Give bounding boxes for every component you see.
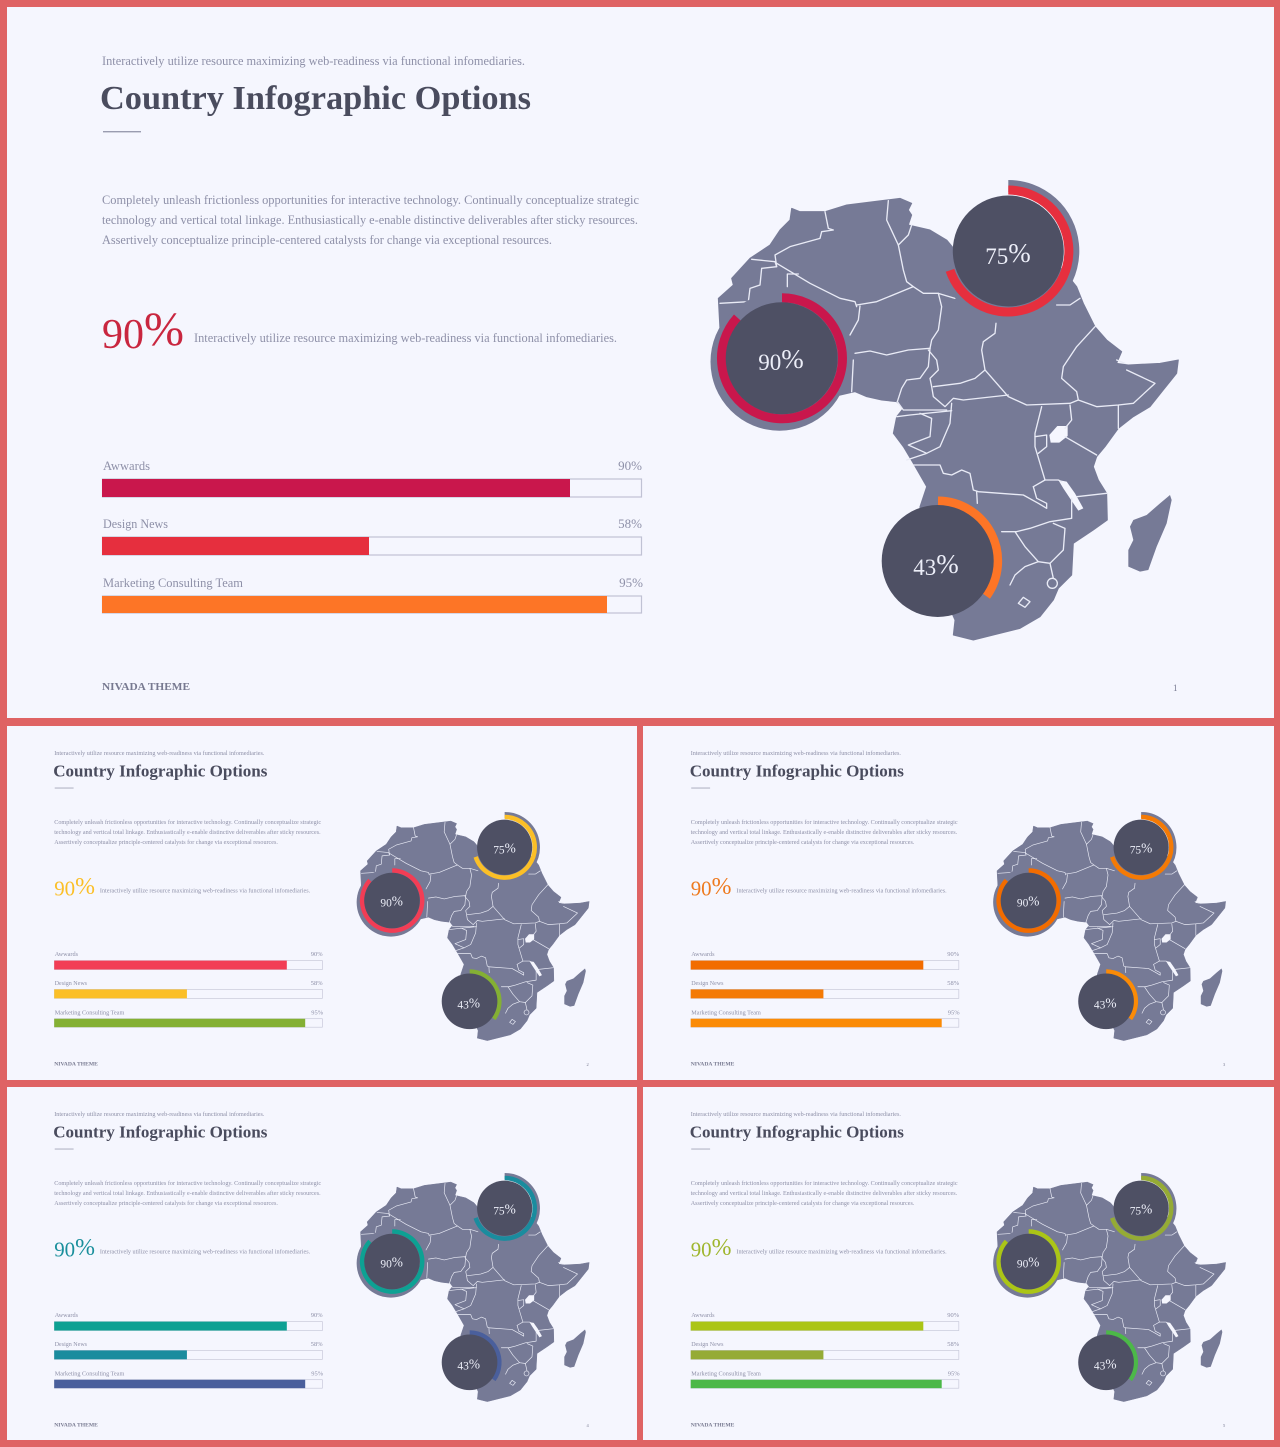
- big stat: 90: [54, 1237, 75, 1261]
- donut: 43%: [442, 972, 499, 1029]
- bar: Design News: [691, 980, 960, 998]
- page number: 1: [1173, 683, 1178, 693]
- donut: 90%: [993, 868, 1062, 937]
- body paragraph: Assertively conceptualize principle-centered catalysts for change via exceptional resources.: [102, 232, 552, 247]
- donut: 43%: [1078, 972, 1136, 1029]
- body paragraph: Assertively conceptualize principle-centered catalysts for change via exceptional resources.: [691, 839, 915, 846]
- map: Africa: [997, 1182, 1226, 1402]
- donut: 75%: %: [1141, 1202, 1152, 1217]
- subtitle: Interactively utilize resource maximizing web-readiness via functional infomediaries.: [691, 750, 901, 757]
- big stat: 90: [54, 876, 75, 900]
- donut: 90%: %: [392, 893, 403, 908]
- bar: Design News: 58%: [311, 1341, 323, 1348]
- page number: 3: [1223, 1062, 1226, 1067]
- panel: slide 4: [7, 1087, 637, 1440]
- bar: Design News: [54, 1341, 323, 1359]
- bar: Marketing Consulting Team: Marketing Consulting Team: [55, 1370, 124, 1377]
- bar: Marketing Consulting Team: 95%: [948, 1370, 960, 1377]
- bar: Design News: [54, 980, 323, 998]
- bar: Marketing Consulting Team: Marketing Consulting Team: [55, 1009, 124, 1016]
- bar: Awwards: [691, 1312, 960, 1331]
- heading: Country Infographic Options: [690, 762, 904, 781]
- bar: Awwards: Awwards: [691, 1312, 715, 1319]
- big stat: 90: [691, 1237, 712, 1261]
- panel: slide 5: [643, 1087, 1274, 1440]
- bar: Awwards: Awwards: [691, 951, 715, 958]
- donut: 75%: [947, 186, 1073, 316]
- bar: Awwards: 90%: [947, 1312, 960, 1319]
- body paragraph: Completely unleash frictionless opportunities for interactive technology. Continually conceptualize strategic: [54, 819, 321, 826]
- big stat: %: [712, 874, 732, 900]
- donut: 43%: 43: [1094, 999, 1106, 1011]
- body paragraph: Assertively conceptualize principle-centered catalysts for change via exceptional resources.: [54, 1200, 278, 1207]
- map: Africa: [997, 821, 1226, 1041]
- heading: Country Infographic Options: [53, 762, 268, 781]
- bar: Marketing Consulting Team: [691, 1370, 960, 1388]
- donut: 75%: 75: [1130, 845, 1141, 857]
- bar: Design News: [691, 1341, 960, 1359]
- donut: 43%: 43: [1094, 1360, 1106, 1372]
- bar: Design News: 58%: [947, 980, 960, 987]
- big stat: %: [144, 303, 184, 356]
- donut: 90%: 90: [1017, 897, 1029, 909]
- donut: 43%: 43: [457, 999, 469, 1011]
- footer: NIVADA THEME: [691, 1061, 735, 1067]
- heading: Country Infographic Options: [100, 80, 531, 117]
- bar: Awwards: 90%: [618, 458, 642, 473]
- body paragraph: [54, 1180, 321, 1207]
- body paragraph: Completely unleash frictionless opportunities for interactive technology. Continually conceptualize strategic: [691, 819, 958, 826]
- bar: Awwards: [54, 951, 323, 970]
- bar: Design News: Design News: [55, 980, 87, 987]
- body paragraph: technology and vertical total linkage. Enthusiastically e-enable distinctive deliverables after sticky resources.: [691, 1190, 957, 1197]
- donut: 90%: %: [781, 344, 804, 374]
- bar: Awwards: Awwards: [55, 951, 79, 958]
- donut: 43%: [882, 501, 998, 617]
- donut: 43%: 43: [457, 1360, 469, 1372]
- body paragraph: Assertively conceptualize principle-centered catalysts for change via exceptional resources.: [54, 839, 278, 846]
- footer: NIVADA THEME: [54, 1422, 98, 1428]
- bar: Marketing Consulting Team: Marketing Consulting Team: [103, 575, 243, 590]
- footer: NIVADA THEME: [691, 1422, 735, 1428]
- body paragraph: [691, 1180, 958, 1207]
- subtitle: Interactively utilize resource maximizing web-readiness via functional infomediaries.: [54, 1111, 265, 1118]
- bar: Design News: [102, 516, 642, 555]
- bar: Design News: Design News: [691, 1341, 724, 1348]
- page number: 2: [587, 1062, 589, 1067]
- map: Africa: [361, 821, 589, 1041]
- donut: 90%: 90: [380, 1258, 392, 1270]
- bar: Marketing Consulting Team: Marketing Consulting Team: [691, 1009, 761, 1016]
- bar: Marketing Consulting Team: [102, 575, 643, 613]
- stat caption: Interactively utilize resource maximizing web-readiness via functional infomediaries.: [736, 1248, 947, 1255]
- donut: 75%: [1110, 1176, 1173, 1241]
- bar: Design News: 58%: [311, 980, 323, 987]
- bar: Marketing Consulting Team: [54, 1370, 324, 1388]
- donut: 43%: [442, 1333, 499, 1390]
- bar: Design News: 58%: [947, 1341, 960, 1348]
- donut: 75%: 75: [985, 244, 1008, 269]
- heading: Country Infographic Options: [53, 1123, 268, 1142]
- bar: Awwards: 90%: [311, 1312, 323, 1319]
- stat caption: Interactively utilize resource maximizing web-readiness via functional infomediaries.: [100, 887, 311, 894]
- donut: 75%: [1110, 815, 1173, 880]
- body paragraph: Completely unleash frictionless opportunities for interactive technology. Continually conceptualize strategic: [102, 192, 639, 207]
- bar: Awwards: [691, 951, 960, 970]
- bar: Marketing Consulting Team: [54, 1009, 324, 1027]
- panel: main slide: [7, 7, 1274, 718]
- body paragraph: Completely unleash frictionless opportunities for interactive technology. Continually conceptualize strategic: [691, 1180, 958, 1187]
- donut: 75%: 75: [493, 845, 505, 857]
- bar: Awwards: [54, 1312, 323, 1331]
- bar: Marketing Consulting Team: 95%: [619, 575, 643, 590]
- bar: Awwards: Awwards: [55, 1312, 79, 1319]
- big stat: %: [75, 1235, 95, 1261]
- body paragraph: technology and vertical total linkage. Enthusiastically e-enable distinctive deliverables after sticky resources.: [102, 212, 638, 227]
- subtitle: Interactively utilize resource maximizing web-readiness via functional infomediaries.: [102, 53, 525, 68]
- donut: 75%: [474, 1176, 537, 1241]
- donut: 75%: 75: [1130, 1206, 1141, 1218]
- donut: 90%: [357, 1229, 425, 1298]
- body paragraph: [691, 819, 958, 846]
- donut: 43%: %: [469, 1356, 480, 1371]
- bar: Awwards: 90%: [311, 951, 323, 958]
- page number: 4: [587, 1423, 590, 1428]
- donut: 43%: 43: [913, 555, 936, 580]
- bar: Awwards: 90%: [947, 951, 960, 958]
- footer: NIVADA THEME: [102, 681, 190, 693]
- donut: 43%: %: [936, 549, 959, 579]
- donut: 43%: %: [1105, 1356, 1117, 1371]
- donut: 75%: %: [1141, 841, 1152, 856]
- donut: 90%: %: [392, 1254, 403, 1269]
- donut: 90%: %: [1028, 1254, 1039, 1269]
- subtitle: Interactively utilize resource maximizing web-readiness via functional infomediaries.: [691, 1111, 901, 1118]
- bar: Design News: 58%: [618, 516, 642, 531]
- heading: Country Infographic Options: [690, 1123, 904, 1142]
- big stat: %: [712, 1235, 732, 1261]
- footer: NIVADA THEME: [54, 1061, 98, 1067]
- donut: 43%: [1078, 1333, 1136, 1390]
- bar: Marketing Consulting Team: [691, 1009, 960, 1027]
- donut: 90%: 90: [758, 350, 781, 375]
- bar: Design News: Design News: [55, 1341, 87, 1348]
- donut: 43%: %: [1105, 995, 1117, 1010]
- bar: Design News: Design News: [691, 980, 724, 987]
- body paragraph: Assertively conceptualize principle-centered catalysts for change via exceptional resources.: [691, 1200, 915, 1207]
- map: Africa: [361, 1182, 589, 1402]
- body paragraph: technology and vertical total linkage. Enthusiastically e-enable distinctive deliverables after sticky resources.: [691, 829, 957, 836]
- donut: 75%: %: [1008, 238, 1031, 268]
- donut: 90%: [710, 293, 848, 431]
- bar: Awwards: [102, 458, 642, 497]
- bar: Awwards: Awwards: [103, 458, 150, 473]
- body paragraph: [54, 819, 321, 846]
- bar: Marketing Consulting Team: 95%: [311, 1370, 324, 1377]
- body paragraph: [102, 192, 639, 247]
- stat caption: Interactively utilize resource maximizing web-readiness via functional infomediaries.: [736, 887, 947, 894]
- page number: 5: [1223, 1423, 1226, 1428]
- map: Africa: [718, 198, 1178, 640]
- donut: 90%: 90: [380, 897, 392, 909]
- body paragraph: technology and vertical total linkage. Enthusiastically e-enable distinctive deliverables after sticky resources.: [54, 829, 321, 836]
- big stat: 90: [691, 876, 712, 900]
- donut: 75%: 75: [493, 1206, 505, 1218]
- big stat: %: [75, 874, 95, 900]
- donut: 90%: [993, 1229, 1062, 1298]
- donut: 75%: [474, 815, 537, 880]
- stat caption: Interactively utilize resource maximizing web-readiness via functional infomediaries.: [100, 1248, 311, 1255]
- stat caption: Interactively utilize resource maximizing web-readiness via functional infomediaries.: [194, 330, 617, 345]
- donut: 75%: %: [505, 1202, 516, 1217]
- bar: Marketing Consulting Team: 95%: [948, 1009, 960, 1016]
- panel: slide 2: [7, 726, 637, 1080]
- body paragraph: Completely unleash frictionless opportunities for interactive technology. Continually conceptualize strategic: [54, 1180, 321, 1187]
- donut: 43%: %: [469, 995, 480, 1010]
- bar: Marketing Consulting Team: 95%: [311, 1009, 324, 1016]
- donut: 90%: 90: [1017, 1258, 1029, 1270]
- donut: 75%: %: [505, 841, 516, 856]
- panel: slide 3: [643, 726, 1274, 1080]
- bar: Design News: Design News: [103, 516, 168, 531]
- body paragraph: technology and vertical total linkage. Enthusiastically e-enable distinctive deliverables after sticky resources.: [54, 1190, 321, 1197]
- subtitle: Interactively utilize resource maximizing web-readiness via functional infomediaries.: [54, 750, 265, 757]
- donut: 90%: %: [1028, 893, 1039, 908]
- big stat: 90: [102, 312, 144, 358]
- donut: 90%: [357, 868, 425, 937]
- bar: Marketing Consulting Team: Marketing Consulting Team: [691, 1370, 761, 1377]
